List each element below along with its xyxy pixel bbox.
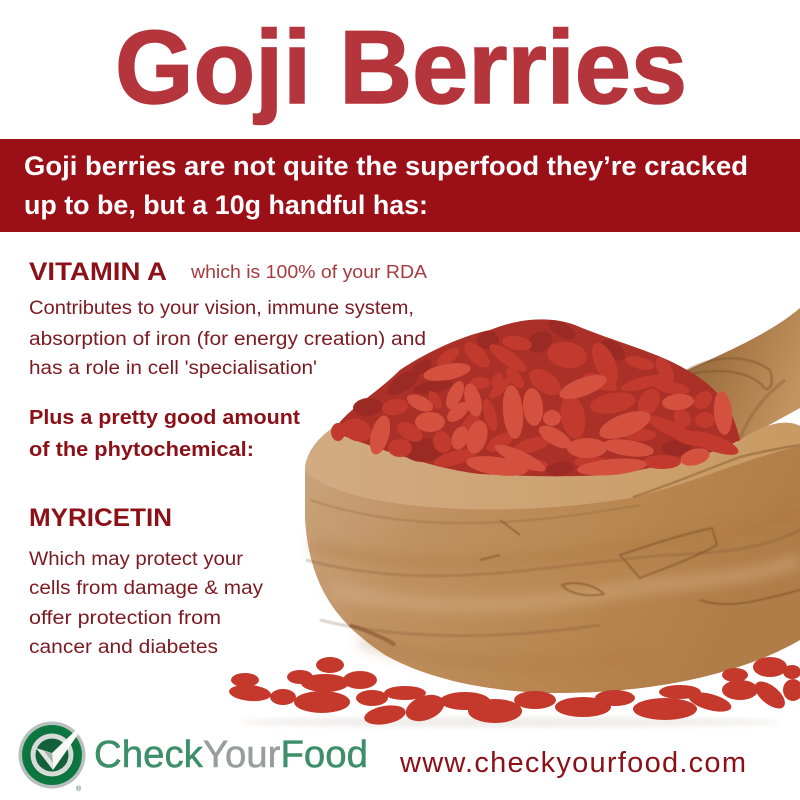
heading: vitamin A: VITAMIN A (29, 258, 167, 286)
myricetin description: cells from damage & may (29, 578, 264, 599)
banner text: Goji berries are not quite the superfood they’re cracked (24, 151, 748, 181)
myricetin description: Which may protect your (29, 549, 244, 570)
pestle (672, 308, 800, 442)
banner (0, 139, 800, 232)
image: scattered berries on the ground (228, 657, 800, 728)
berry pile base (333, 319, 740, 476)
loose berries (228, 657, 800, 728)
bright berries (366, 360, 734, 479)
mid-red berries (331, 334, 741, 471)
vitamin A description: has a role in cell 'specialisation' (29, 358, 317, 379)
logo wordmark: CheckYourFood (94, 734, 368, 776)
phytochemical subheading: Plus a pretty good amount (29, 407, 300, 429)
myricetin description (29, 549, 264, 658)
logo: CheckYourFood (18, 722, 368, 793)
registered mark: ® (76, 785, 82, 793)
myricetin description: offer protection from (29, 608, 221, 629)
phytochemical subheading (29, 407, 300, 461)
wood grain (306, 358, 800, 645)
heading: myricetin: MYRICETIN (29, 504, 172, 532)
phytochemical subheading: of the phytochemical: (29, 439, 254, 461)
image: pile of goji berries (331, 316, 741, 479)
mortar bowl (305, 417, 800, 693)
title: Goji Berries (115, 10, 687, 126)
vitamin A description: Contributes to your vision, immune system, (29, 298, 414, 319)
dark berries (352, 316, 692, 478)
bowl rim (305, 417, 800, 509)
vitamin A description (29, 298, 426, 379)
banner text: up to be, but a 10g handful has: (24, 190, 428, 220)
vitamin A description: absorption of iron (for energy creation) and (29, 329, 426, 350)
image: wooden mortar and pestle (305, 308, 800, 693)
section: vitamin A (29, 258, 427, 379)
ground shadow (240, 717, 780, 727)
banner text (24, 151, 748, 220)
RDA note: which is 100% of your RDA (190, 262, 427, 282)
website address: www.checkyourfood.com (399, 747, 746, 779)
section: myricetin (29, 504, 264, 658)
logo icon: green check badge (18, 722, 86, 788)
myricetin description: cancer and diabetes (29, 637, 218, 658)
wood shading bands (310, 510, 800, 663)
